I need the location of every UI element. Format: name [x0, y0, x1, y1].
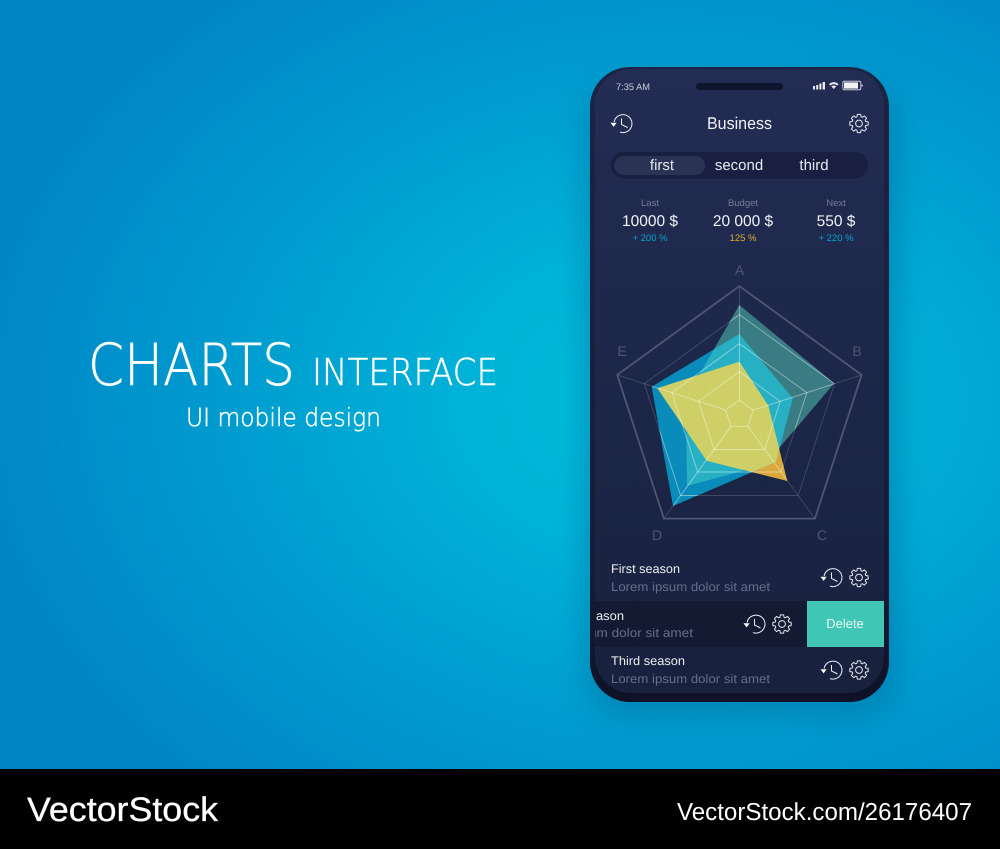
stat: last	[622, 198, 678, 244]
row text: ason	[596, 609, 624, 623]
stat: last: 10000 $	[622, 213, 678, 230]
stat: next: 550 $	[817, 213, 856, 230]
icon: history	[610, 115, 632, 133]
row text	[595, 613, 693, 638]
series: yellow	[657, 362, 780, 472]
stat: next: Next	[826, 198, 846, 209]
row text: um dolor sit amet	[589, 626, 694, 640]
outer pentagon	[617, 286, 862, 519]
phone	[589, 67, 889, 702]
series overlap	[686, 334, 793, 486]
wifi icon	[829, 82, 839, 89]
series: blue	[652, 334, 793, 506]
tab second: second	[715, 157, 763, 174]
stat: budget: 125 %	[730, 233, 757, 244]
radar chart	[617, 262, 862, 543]
delete button	[807, 601, 884, 647]
stat: next: + 220 %	[818, 233, 854, 244]
screen title: Business	[707, 114, 772, 133]
list row: third season	[611, 654, 868, 686]
footer band	[0, 769, 1000, 849]
phone shadow	[584, 82, 900, 718]
axis labels: E	[617, 343, 627, 359]
grid over series	[652, 305, 834, 506]
tabs track	[611, 152, 868, 178]
segmented tabs	[611, 152, 868, 178]
phone body	[590, 67, 889, 702]
stat: last: Last	[641, 198, 659, 209]
title	[88, 331, 498, 399]
header	[610, 114, 868, 133]
axis labels: A	[735, 262, 745, 278]
subtitle: UI mobile design	[186, 403, 381, 432]
status bar	[616, 81, 863, 93]
list row: third season: Third season	[611, 654, 685, 668]
stat: budget: Budget	[728, 198, 758, 209]
stats	[622, 198, 856, 244]
stat: budget	[713, 198, 774, 244]
series: orange part	[657, 362, 787, 481]
tab third: third	[799, 157, 829, 174]
icon: settings	[850, 114, 868, 133]
grid	[617, 286, 862, 519]
list row: first season: First season	[611, 562, 680, 576]
notch	[696, 83, 783, 90]
footer url: VectorStock.com/26176407	[677, 799, 972, 826]
axis labels: B	[852, 343, 862, 359]
delete button: Delete	[826, 616, 864, 631]
tab first: first	[650, 157, 675, 174]
stat: last: + 200 %	[632, 233, 668, 244]
phone screen	[595, 69, 884, 693]
axis labels	[617, 262, 862, 543]
time: 7:35 AM	[616, 82, 650, 93]
series: teal	[686, 305, 834, 486]
axis labels: C	[817, 527, 827, 543]
row background	[595, 601, 807, 647]
list row: second season swiped	[589, 601, 884, 647]
list row: first season: Lorem ipsum dolor sit amet	[611, 580, 771, 594]
axis labels: D	[652, 527, 662, 543]
stat: next	[817, 198, 856, 244]
list row: first season	[611, 562, 868, 594]
list row: third season: Lorem ipsum dolor sit amet	[611, 672, 771, 686]
title: CHARTS	[88, 331, 295, 399]
stat: budget: 20 000 $	[713, 213, 774, 230]
battery icon	[843, 81, 863, 90]
footer logo: VectorStock	[27, 791, 219, 829]
signal bars	[813, 82, 825, 90]
active tab	[614, 156, 705, 175]
title: INTERFACE	[312, 351, 498, 394]
